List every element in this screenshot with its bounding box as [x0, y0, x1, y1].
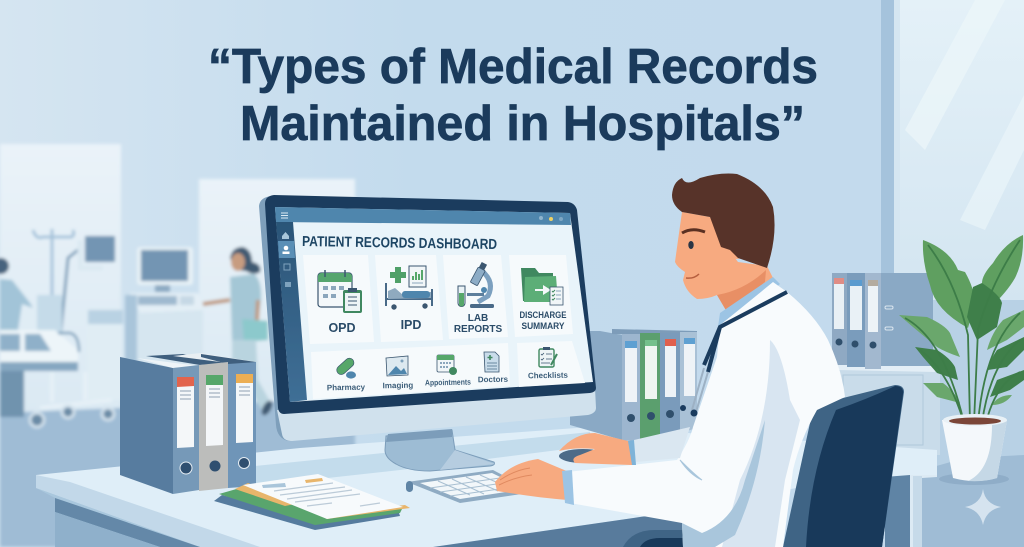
card: OPD [303, 255, 374, 344]
title [208, 40, 818, 151]
title: “Types of Medical Records [208, 40, 818, 94]
binder: green label [199, 362, 228, 491]
card: discharge summary: SUMMARY [522, 321, 565, 332]
monitor stand [385, 429, 495, 471]
binders [832, 273, 933, 369]
floor [0, 398, 355, 547]
icon: calendar and clipboard [318, 270, 362, 313]
lab coat [567, 282, 845, 547]
wall panels [0, 144, 355, 414]
keyboard [406, 470, 535, 503]
card: lab reports [443, 255, 508, 339]
pot [942, 414, 1007, 481]
dashboard heading: PATIENT RECORDS DASHBOARD [302, 234, 497, 253]
far arm sleeve [627, 427, 690, 465]
doctor [495, 174, 845, 547]
icon: appointments calendar [437, 355, 457, 375]
screen [275, 207, 593, 402]
binder tops [137, 353, 256, 368]
card: OPD: OPD [328, 321, 356, 335]
neck and face [675, 212, 773, 312]
binders behind monitor [570, 329, 697, 441]
computer workstation [125, 247, 203, 400]
icon: doctors document [484, 352, 499, 372]
desk [36, 427, 937, 547]
blurred hospital ward background [0, 144, 355, 547]
card: discharge summary [509, 255, 573, 337]
card: IPD: IPD [401, 318, 421, 332]
patient [0, 258, 33, 330]
label: appointments: Appointments [425, 378, 471, 387]
icon: checklist clipboard [539, 347, 557, 367]
label: doctors: Doctors [478, 375, 509, 384]
card: lab reports: REPORTS [454, 324, 502, 335]
stethoscope [680, 292, 787, 416]
right shelf with binders [832, 273, 940, 455]
collar [718, 277, 780, 330]
IV stand and monitor [33, 229, 123, 400]
card: lower row of services [311, 343, 510, 399]
icon: pharmacy pill [335, 356, 356, 379]
hand on mouse [559, 433, 632, 465]
binder side [120, 357, 173, 494]
coat shading [680, 340, 800, 547]
label: checklists: Checklists [528, 371, 569, 380]
document stack [214, 474, 410, 530]
icon: imaging [386, 356, 408, 376]
label: imaging: Imaging [383, 381, 413, 390]
front binders [120, 353, 256, 494]
cabinet [838, 362, 940, 455]
card: lab reports: LAB [468, 313, 488, 324]
potted plant [899, 235, 1024, 485]
card: discharge summary: DISCHARGE [520, 310, 566, 321]
icon: microscope and test tube [458, 262, 494, 308]
leaves [899, 235, 1024, 423]
monitor body [259, 196, 300, 441]
office chair [623, 385, 904, 547]
sparkle mark [965, 489, 1001, 525]
binder: red label [173, 365, 199, 494]
computer monitor [259, 195, 596, 471]
icon: bed with plus and chart [386, 266, 432, 310]
binder: orange label [228, 362, 256, 488]
card: checklists [517, 341, 585, 387]
card: IPD [375, 255, 443, 342]
hospital bed [0, 330, 114, 427]
sidebar [276, 222, 307, 402]
title: Maintained in Hospitals” [240, 97, 805, 151]
hair [672, 174, 775, 268]
label: pharmacy: Pharmacy [327, 383, 366, 392]
nurse [203, 247, 274, 417]
header bar [275, 207, 571, 225]
icon: folder with checklist [521, 268, 563, 305]
hand on keyboard [495, 459, 574, 505]
